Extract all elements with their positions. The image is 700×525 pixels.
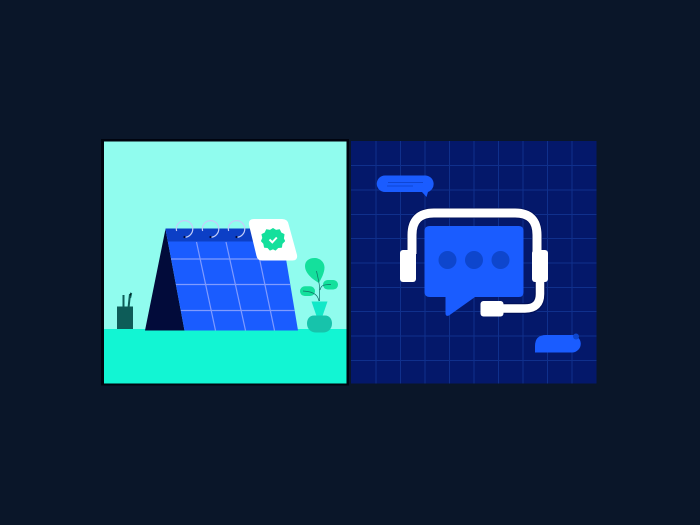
left earcup <box>400 250 416 282</box>
sky background <box>104 142 346 330</box>
right earcup <box>532 250 548 282</box>
grid lines <box>351 141 596 384</box>
small chat bubble <box>377 175 434 197</box>
panel frame <box>101 139 349 386</box>
headband <box>412 213 537 254</box>
panel: solar calendar illustration <box>101 139 349 386</box>
small blue bubble <box>535 334 581 352</box>
icon: calendar solar panel <box>145 221 298 330</box>
mic arm <box>500 280 540 308</box>
panel: customer support illustration <box>351 141 596 384</box>
calendar grid lines <box>171 242 294 330</box>
calendar top bar <box>166 228 283 242</box>
ground <box>104 329 346 384</box>
microphone <box>480 301 504 316</box>
icon: verified badge <box>262 228 285 250</box>
vase cone <box>312 302 328 316</box>
top leaf <box>305 258 324 283</box>
panel background <box>351 141 596 384</box>
calendar back support <box>145 229 184 330</box>
icon: headset with speech bubble <box>400 213 548 316</box>
pot <box>307 316 332 332</box>
icon: potted plant <box>300 258 338 332</box>
calendar blue sheet <box>166 229 298 330</box>
icon: pencil cup <box>117 293 133 329</box>
right leaf <box>323 280 338 290</box>
stems <box>303 271 331 301</box>
left leaf <box>300 286 315 296</box>
binding rings <box>176 221 245 237</box>
badge card <box>249 219 297 260</box>
speech bubble <box>424 226 524 316</box>
